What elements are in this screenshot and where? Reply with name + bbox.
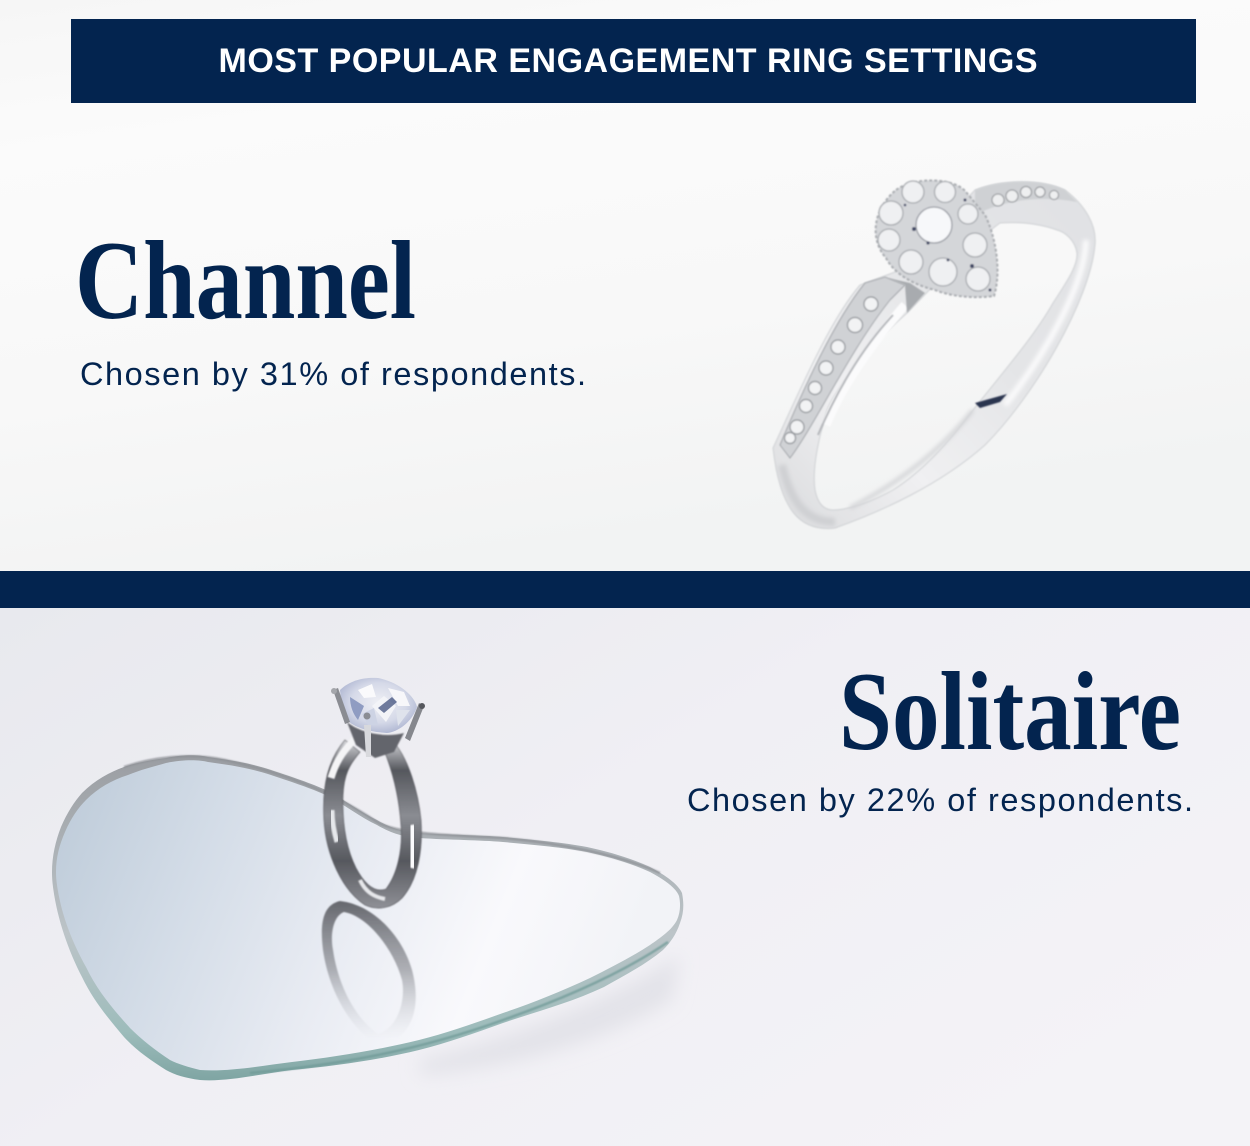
icon: ring reflection [322, 901, 416, 1040]
prongs and head [331, 688, 425, 758]
heading: Solitaire: Solitaire [839, 650, 1181, 774]
far shank pave diamonds [975, 182, 1077, 215]
title: MOST POPULAR ENGAGEMENT RING SETTINGS [218, 42, 1038, 80]
panel: solitaire setting [0, 608, 1250, 1146]
text: channel share: Chosen by 31% of respondents. [80, 356, 586, 392]
icon: heart mirror [52, 755, 683, 1080]
icon: solitaire ring [324, 678, 425, 908]
band highlights [331, 738, 356, 778]
mirror rim shading [124, 756, 660, 873]
left shank pave diamonds [780, 277, 905, 458]
gallery under head [888, 278, 925, 313]
text: solitaire share: Chosen by 22% of respondents. [687, 782, 1193, 818]
title banner [71, 19, 1196, 103]
diamond stone [340, 678, 417, 733]
panel: channel setting [0, 0, 1250, 571]
icon: pear halo diamond ring [773, 180, 1095, 528]
mirror glass surface [56, 760, 680, 1070]
ring band [324, 740, 421, 908]
pear diamond cluster [876, 180, 997, 297]
heading: Channel: Channel [75, 219, 416, 343]
divider band [0, 571, 1250, 608]
band highlights [1005, 240, 1086, 405]
